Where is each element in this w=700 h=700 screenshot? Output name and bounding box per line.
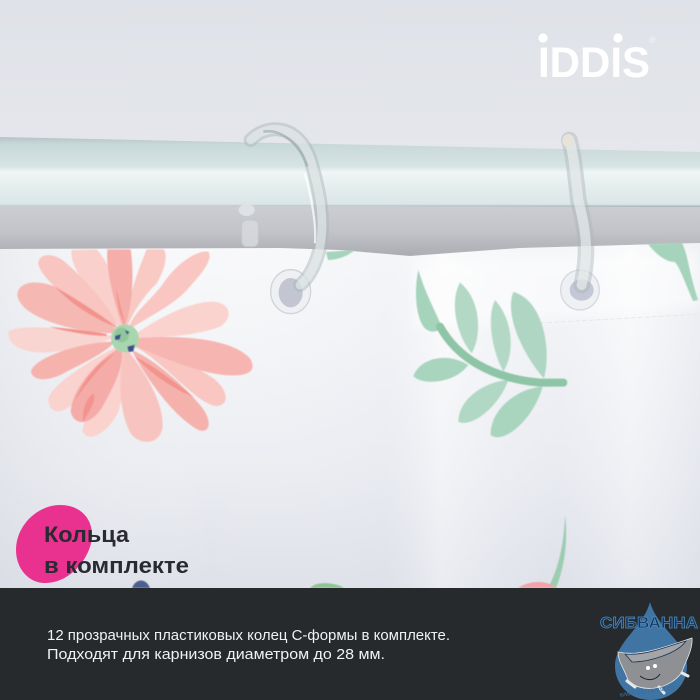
- small leaf near first ring: [326, 250, 355, 260]
- logo: Сибванна water drop with bathtub: СИБВАННА: [600, 615, 698, 632]
- heading: Кольца в комплекте: [44, 522, 189, 578]
- description text: 12 прозрачных пластиковых колец С-формы в комплекте.: [47, 627, 450, 644]
- logo: IDDIS: ®: [649, 35, 656, 45]
- heading: Кольца в комплекте: Кольца: [44, 522, 130, 547]
- ring two: [561, 134, 599, 310]
- logo: Сибванна water drop with bathtub: www.sibvanna.ru: [618, 684, 675, 699]
- dark description panel: [0, 588, 700, 700]
- wall background: [0, 0, 700, 260]
- logo: IDDIS: IDDIS: [538, 39, 650, 87]
- flower print: [8, 249, 253, 442]
- bottom stem and flower print: [132, 515, 566, 588]
- heading: Кольца в комплекте: в комплекте: [44, 553, 189, 578]
- curtain rod: [0, 137, 700, 207]
- pink blob badge: [16, 505, 92, 583]
- logo: Сибванна water drop with bathtub: [600, 602, 698, 700]
- ring one: [239, 129, 322, 314]
- leaf branch print: [413, 270, 563, 437]
- leaf print top right: [648, 243, 698, 301]
- shadow under rod: [0, 200, 700, 260]
- description text: [47, 627, 450, 663]
- curtain fabric: [0, 243, 700, 590]
- description text: Подходят для карнизов диаметром до 28 мм.: [47, 646, 385, 663]
